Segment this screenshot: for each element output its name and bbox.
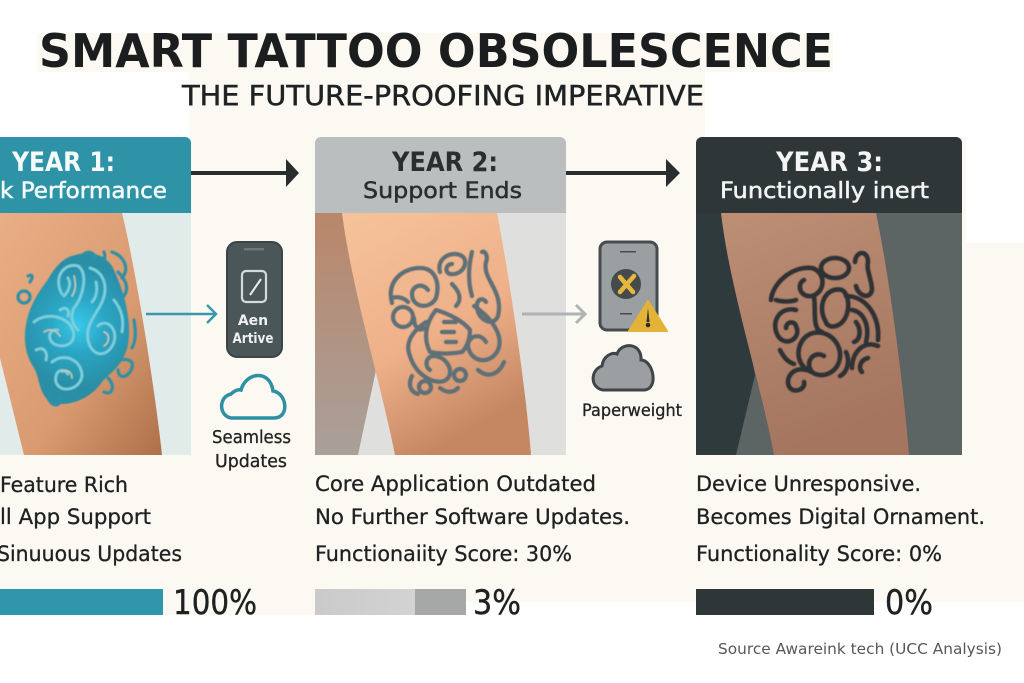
year 3 score value: 0% [885, 583, 933, 623]
year 2 faded tattoo [391, 252, 504, 394]
year 1 glowing tattoo [18, 252, 135, 405]
year 1 subheading: k Performance [0, 179, 167, 204]
subtitle: THE FUTURE-PROOFING IMPERATIVE [181, 79, 704, 112]
panel: year 2 [315, 213, 566, 455]
arrow: tattoo to app [146, 305, 216, 323]
year 2 score bar [315, 589, 466, 615]
arrow: year 1 to year 2 [191, 159, 299, 187]
warning triangle [629, 301, 667, 331]
year 3 subheading: Functionally inert [720, 179, 929, 204]
source note: Source Awareink tech (UCC Analysis) [718, 640, 1002, 658]
year 2 score value: 3% [473, 583, 521, 623]
year 3 description: Becomes Digital Ornament. [696, 505, 985, 529]
arrow: year 2 to year 3 [566, 159, 680, 187]
year 2 heading: YEAR 2: [391, 147, 498, 178]
icon: grey cloud [593, 346, 653, 390]
panel: year 1 [0, 213, 191, 455]
year 3 arm [721, 213, 909, 455]
year 3 image background [696, 213, 962, 455]
year 3 description: Device Unresponsive. [696, 472, 921, 496]
icon: teal cloud [222, 375, 285, 418]
panel header: year 3 [696, 137, 962, 213]
year 3 heading: YEAR 3: [775, 147, 883, 178]
label: paperweight: Paperweight [582, 401, 682, 421]
year 2 description: Functionaiity Score: 30% [315, 542, 572, 566]
panel header: year 2 [315, 137, 566, 213]
phone label: Aen [238, 313, 268, 329]
panel header: year 1 [0, 137, 191, 213]
icon: failed phone [600, 242, 667, 331]
year 3 rear arm [696, 213, 755, 455]
year 1 arm [0, 213, 162, 455]
year 2 subheading: Support Ends [363, 179, 522, 204]
year 1 score bar [0, 589, 163, 615]
year 3 inert tattoo [771, 253, 878, 390]
panel: year 3 [696, 213, 962, 455]
year 1 description [0, 473, 182, 566]
label: seamless updates: Updates [215, 451, 287, 472]
year 2 description: Core Application Outdated [315, 472, 596, 496]
year 1 score value: 100% [173, 583, 257, 623]
year 2 image background [315, 213, 566, 455]
year 3 description [696, 472, 985, 566]
year 2 arm [342, 213, 531, 455]
year 3 description: Functionality Score: 0% [696, 542, 942, 566]
year 1 description: Sinuuous Updates [0, 542, 182, 566]
label: seamless updates: Seamless [212, 427, 291, 448]
year 1 image background [0, 213, 191, 455]
icon: active phone [227, 242, 282, 357]
arrow: tattoo to phone (faded) [522, 305, 585, 323]
year 2 description [315, 472, 630, 566]
year 2 description: No Further Software Updates. [315, 505, 630, 529]
year 1 description: Feature Rich [0, 473, 128, 497]
icon: active phone: Artive [232, 331, 274, 347]
year 1 heading: YEAR 1: [11, 147, 115, 178]
year 2 rear arm [315, 213, 376, 455]
year 3 score bar [696, 589, 874, 615]
year 1 description: ll App Support [0, 505, 151, 529]
label: seamless updates [212, 427, 291, 472]
title: SMART TATTOO OBSOLESCENCE [39, 24, 833, 78]
